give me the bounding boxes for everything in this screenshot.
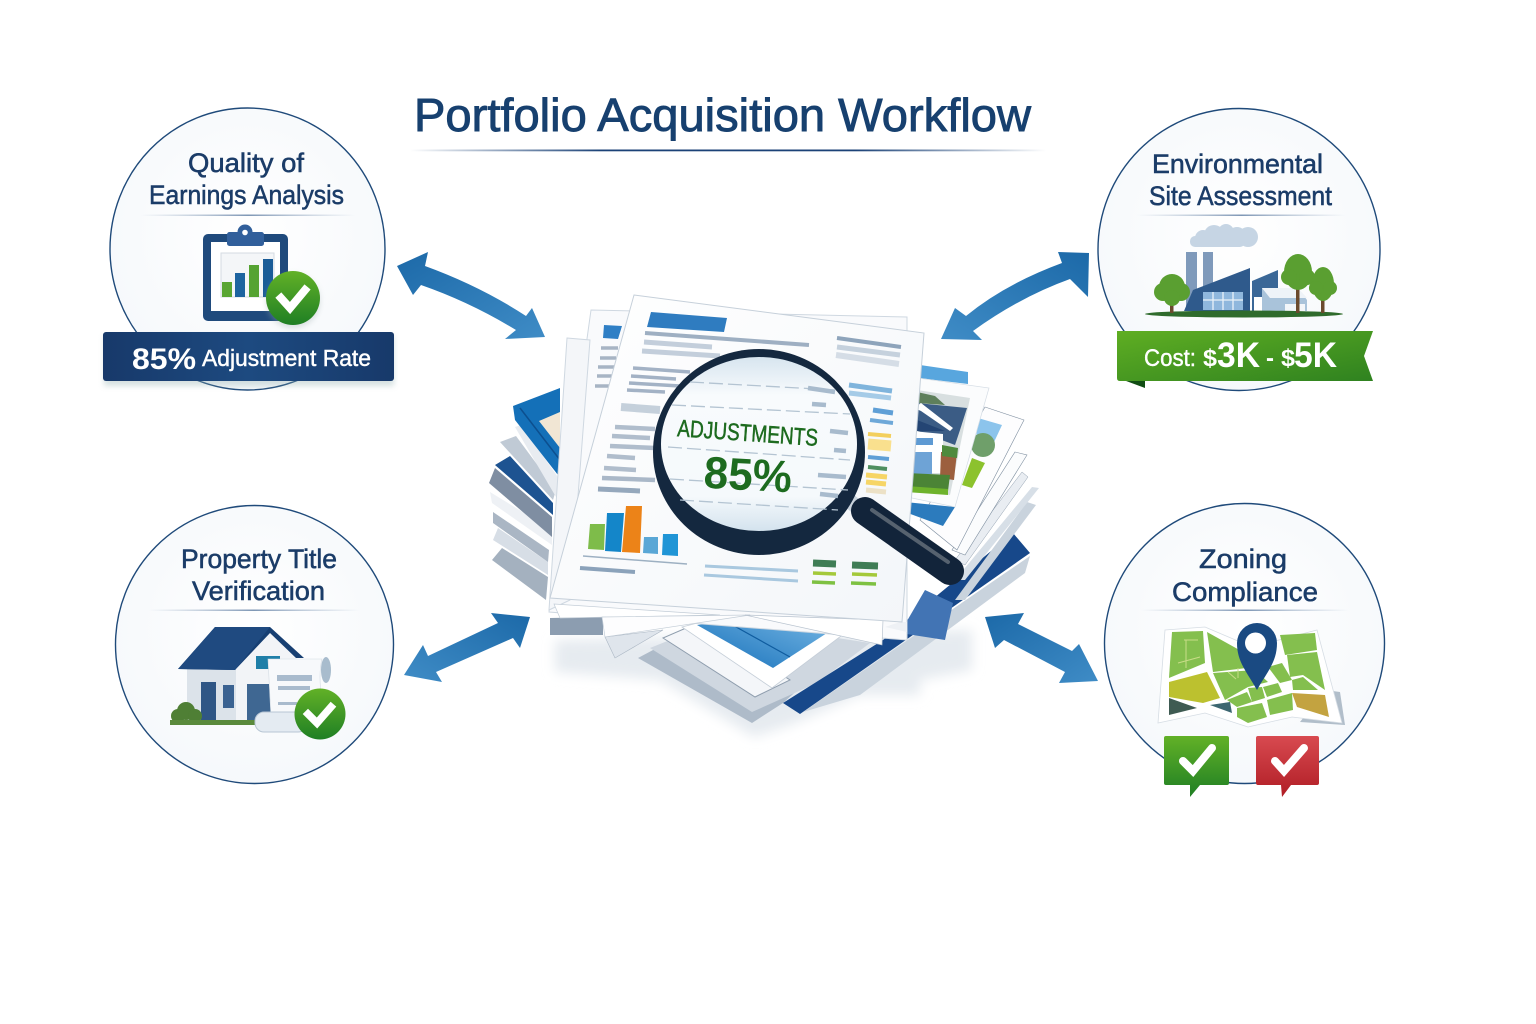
badge: 85% adjustment rate <box>103 332 394 386</box>
arrow: top right double arrow <box>941 252 1089 340</box>
badge: cost ribbon <box>1117 331 1373 388</box>
arrow: bottom right double arrow <box>985 613 1098 683</box>
heading: zoning compliance <box>1172 544 1318 607</box>
heading: quality of earnings: Earnings Analysis <box>149 180 344 210</box>
magnified adjustments callout: ADJUSTMENTS <box>676 415 819 452</box>
heading: environmental site assessment <box>1149 149 1332 211</box>
right side fanned sheets <box>920 407 1039 600</box>
heading: environmental site assessment: Site Assessment <box>1149 181 1332 211</box>
magnifying glass <box>653 349 950 571</box>
photo of house <box>906 390 970 495</box>
icon: red review check <box>1256 736 1319 797</box>
heading: property title verification <box>181 544 337 606</box>
badge: cost ribbon: $ <box>1203 345 1218 372</box>
heading: quality of earnings <box>149 148 344 210</box>
badge: 85% adjustment rate: Adjustment Rate <box>202 345 371 371</box>
central document stack with magnifier <box>489 295 1039 737</box>
icon: house with title scroll and check <box>170 627 346 740</box>
icon: green approval check <box>1164 736 1229 797</box>
panel: quality of earnings analysis <box>103 108 394 390</box>
badge: cost ribbon: 3K <box>1217 336 1260 375</box>
badge: cost ribbon: $ <box>1281 345 1296 372</box>
badge: cost ribbon: 5K <box>1294 336 1337 375</box>
panel: zoning compliance <box>1104 504 1384 797</box>
badge: cost ribbon: Cost: <box>1144 345 1196 372</box>
arrow: bottom left double arrow <box>404 613 530 682</box>
badge: 85% adjustment rate: 85% <box>132 343 196 376</box>
title: Portfolio Acquisition Workflow <box>414 89 1032 141</box>
lower document fan <box>550 533 1030 723</box>
back report sheets <box>549 310 907 645</box>
heading: property title verification: Verification <box>192 576 325 606</box>
heading: zoning compliance: Compliance <box>1172 577 1318 607</box>
front report page <box>550 295 924 622</box>
left side fanned sheets <box>489 388 560 600</box>
stack shadow <box>555 630 972 737</box>
panel: environmental site assessment <box>1098 108 1380 390</box>
heading: property title verification: Property Title <box>181 544 337 574</box>
icon: clipboard with bar chart and check <box>203 224 320 328</box>
icon: folded zoning map with pin <box>1158 623 1345 727</box>
arrow: top left double arrow <box>397 252 545 339</box>
heading: zoning compliance: Zoning <box>1199 544 1287 574</box>
heading: environmental site assessment: Environmental <box>1152 149 1323 179</box>
heading: quality of earnings: Quality of <box>188 148 304 178</box>
photo sheets <box>905 365 989 526</box>
magnified adjustments callout <box>676 415 819 502</box>
magnified adjustments callout: 85% <box>703 447 793 502</box>
bar chart <box>588 506 678 556</box>
badge: cost ribbon: - <box>1266 345 1274 372</box>
icon: factory with trees <box>1145 224 1343 318</box>
panel: property title verification <box>116 506 394 784</box>
